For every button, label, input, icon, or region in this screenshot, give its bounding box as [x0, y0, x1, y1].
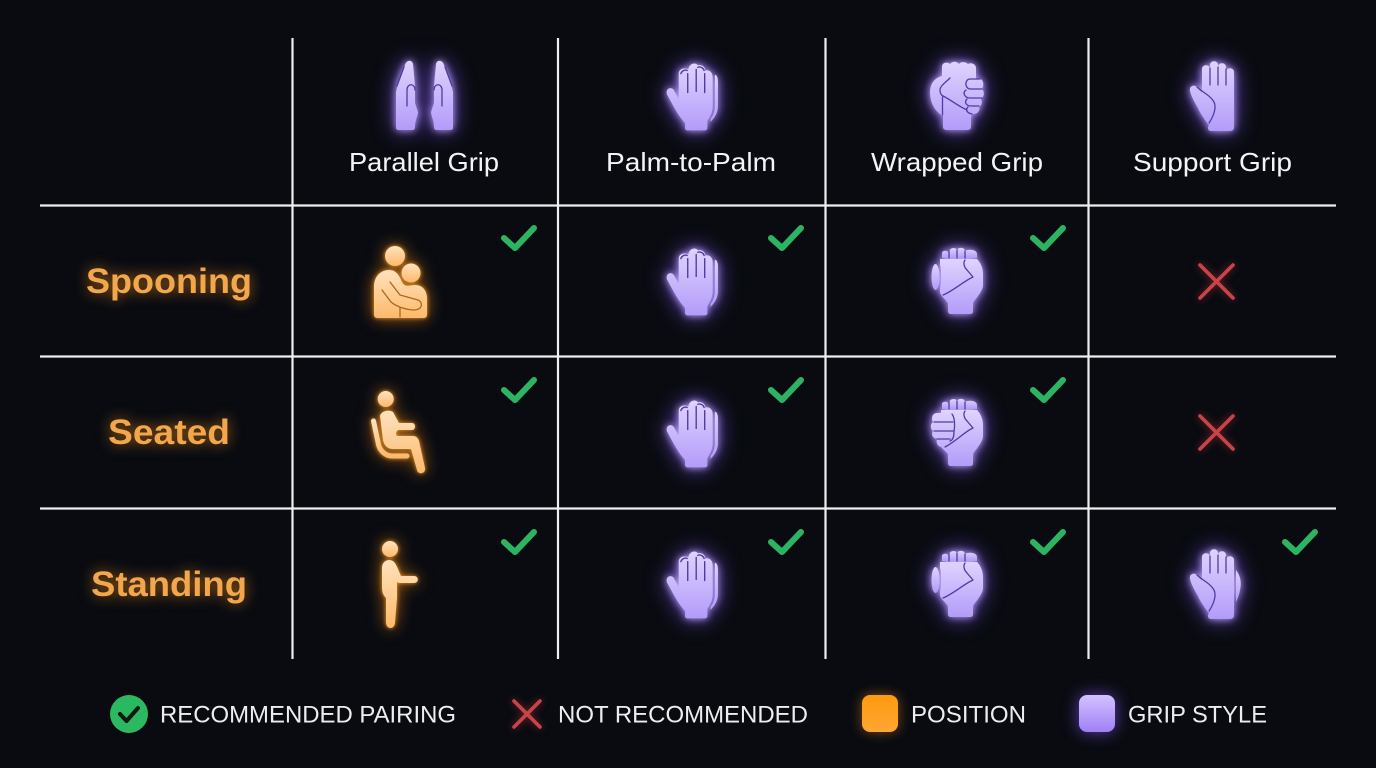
legend: not recommended: NOT RECOMMENDED [558, 702, 808, 728]
crosses [1200, 265, 1233, 449]
icon: wrapped grip [930, 62, 984, 130]
label: Support Grip [1133, 147, 1292, 177]
checks for row 3 [504, 532, 1315, 552]
legend: recommended pairing: RECOMMENDED PAIRING [160, 702, 456, 728]
label: Parallel Grip [349, 147, 499, 177]
icon: palm to palm [667, 64, 718, 130]
checks for row 1 [504, 228, 1063, 248]
legend: position: POSITION [911, 702, 1026, 728]
icon: fist row 1 [932, 248, 983, 314]
header: Wrapped Grip [871, 62, 1043, 177]
icon: fist row 3 [932, 551, 983, 617]
icon: palm row 2 [667, 401, 718, 467]
icon: palm row 3 [667, 552, 718, 618]
icon: support hand row 3 [1190, 549, 1241, 619]
table grid lines [40, 38, 1336, 659]
icon: standing person [382, 541, 418, 628]
header: Support Grip [1133, 61, 1292, 177]
legend: position [862, 695, 1026, 732]
icon: fist row 2 [931, 399, 983, 466]
icon: support hand [1190, 61, 1234, 131]
label: Wrapped Grip [871, 147, 1043, 177]
row label: Spooning: Spooning [86, 262, 252, 301]
icon: parallel grip hands [396, 61, 453, 130]
row label: Standing: Standing [91, 565, 247, 604]
icon: seated person [374, 391, 425, 473]
icon: palm row 1 [667, 249, 718, 315]
row label: Seated: Seated [108, 413, 230, 452]
checks for row 2 [504, 380, 1063, 400]
legend: grip style: GRIP STYLE [1128, 702, 1267, 728]
legend: recommended pairing [110, 695, 456, 733]
label: Palm-to-Palm [606, 147, 776, 177]
header: Parallel Grip [349, 61, 499, 177]
legend [110, 695, 1267, 733]
legend: grip style [1079, 695, 1267, 732]
icon: spooning couple [374, 246, 427, 318]
header: Palm-to-Palm [606, 64, 776, 177]
